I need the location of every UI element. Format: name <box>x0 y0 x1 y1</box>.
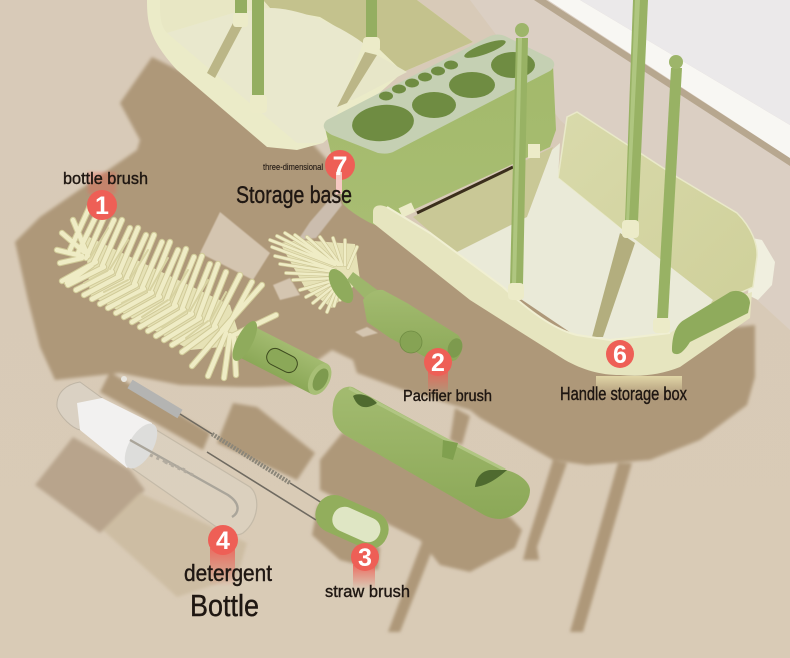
dark slit <box>417 167 513 213</box>
top storage tray <box>147 0 473 150</box>
callout 4: detergent bottle: detergent <box>184 560 273 586</box>
tray front rim <box>373 205 752 396</box>
green rods of top tray <box>233 0 380 113</box>
white floor <box>455 143 713 342</box>
bottle brush bristles <box>57 206 276 378</box>
callout 2: pacifier brush <box>403 348 492 405</box>
callout 1: bottle brush <box>63 169 148 220</box>
white lug <box>748 238 775 300</box>
base top face <box>324 34 554 154</box>
callout 3: straw brush: 3 <box>358 544 372 572</box>
back wall <box>558 112 757 305</box>
callout 4: detergent bottle: Bottle <box>190 588 259 623</box>
gray bristle section <box>130 384 180 414</box>
green side handle <box>672 291 750 354</box>
right handle storage box tray <box>413 112 775 342</box>
callout 7: storage base: three-dimensional <box>263 162 323 172</box>
pacifier green handle <box>324 265 465 365</box>
white pump <box>77 398 153 468</box>
pacifier brush <box>270 233 465 365</box>
base body <box>325 40 556 226</box>
bottle brush <box>57 206 339 403</box>
green pad <box>310 489 394 555</box>
shaded floor <box>413 147 553 253</box>
bottle brush green handle <box>228 318 339 403</box>
clear cap <box>57 382 102 430</box>
base holes <box>350 37 535 144</box>
callout 7: storage base: 7 <box>332 151 348 181</box>
struts of top tray <box>207 23 377 107</box>
gold reflection under rim <box>596 376 682 396</box>
callout 3: straw brush: straw brush <box>325 582 410 601</box>
dip tube <box>130 440 238 517</box>
callout 1: bottle brush: 1 <box>95 192 109 220</box>
callout 6: handle storage box: 6 <box>613 341 627 369</box>
callout 6: handle storage box: Handle storage box <box>560 384 687 404</box>
clear body <box>130 428 257 535</box>
green rods of box <box>508 0 683 333</box>
callout 7: storage base: Storage base <box>236 182 352 209</box>
tube holes <box>353 394 377 407</box>
callout 6: handle storage box <box>560 340 687 404</box>
wire shaft <box>180 414 322 520</box>
callout 1: bottle brush: bottle brush <box>63 169 148 188</box>
callout 7: storage base <box>236 150 355 209</box>
detergent bottle <box>57 382 257 535</box>
callout 2: pacifier brush: 2 <box>431 349 445 377</box>
callout 2: pacifier brush: Pacifier brush <box>403 388 492 405</box>
floor strut <box>592 233 635 337</box>
light patches between shadows <box>200 192 378 337</box>
storage base with holes <box>324 34 556 226</box>
pacifier bristles <box>270 233 360 312</box>
callout 4: detergent bottle <box>184 525 273 623</box>
callout 3: straw brush <box>325 543 410 601</box>
straw brush <box>121 376 394 555</box>
handle tube <box>332 387 530 519</box>
callout 4: detergent bottle: 4 <box>216 527 230 555</box>
